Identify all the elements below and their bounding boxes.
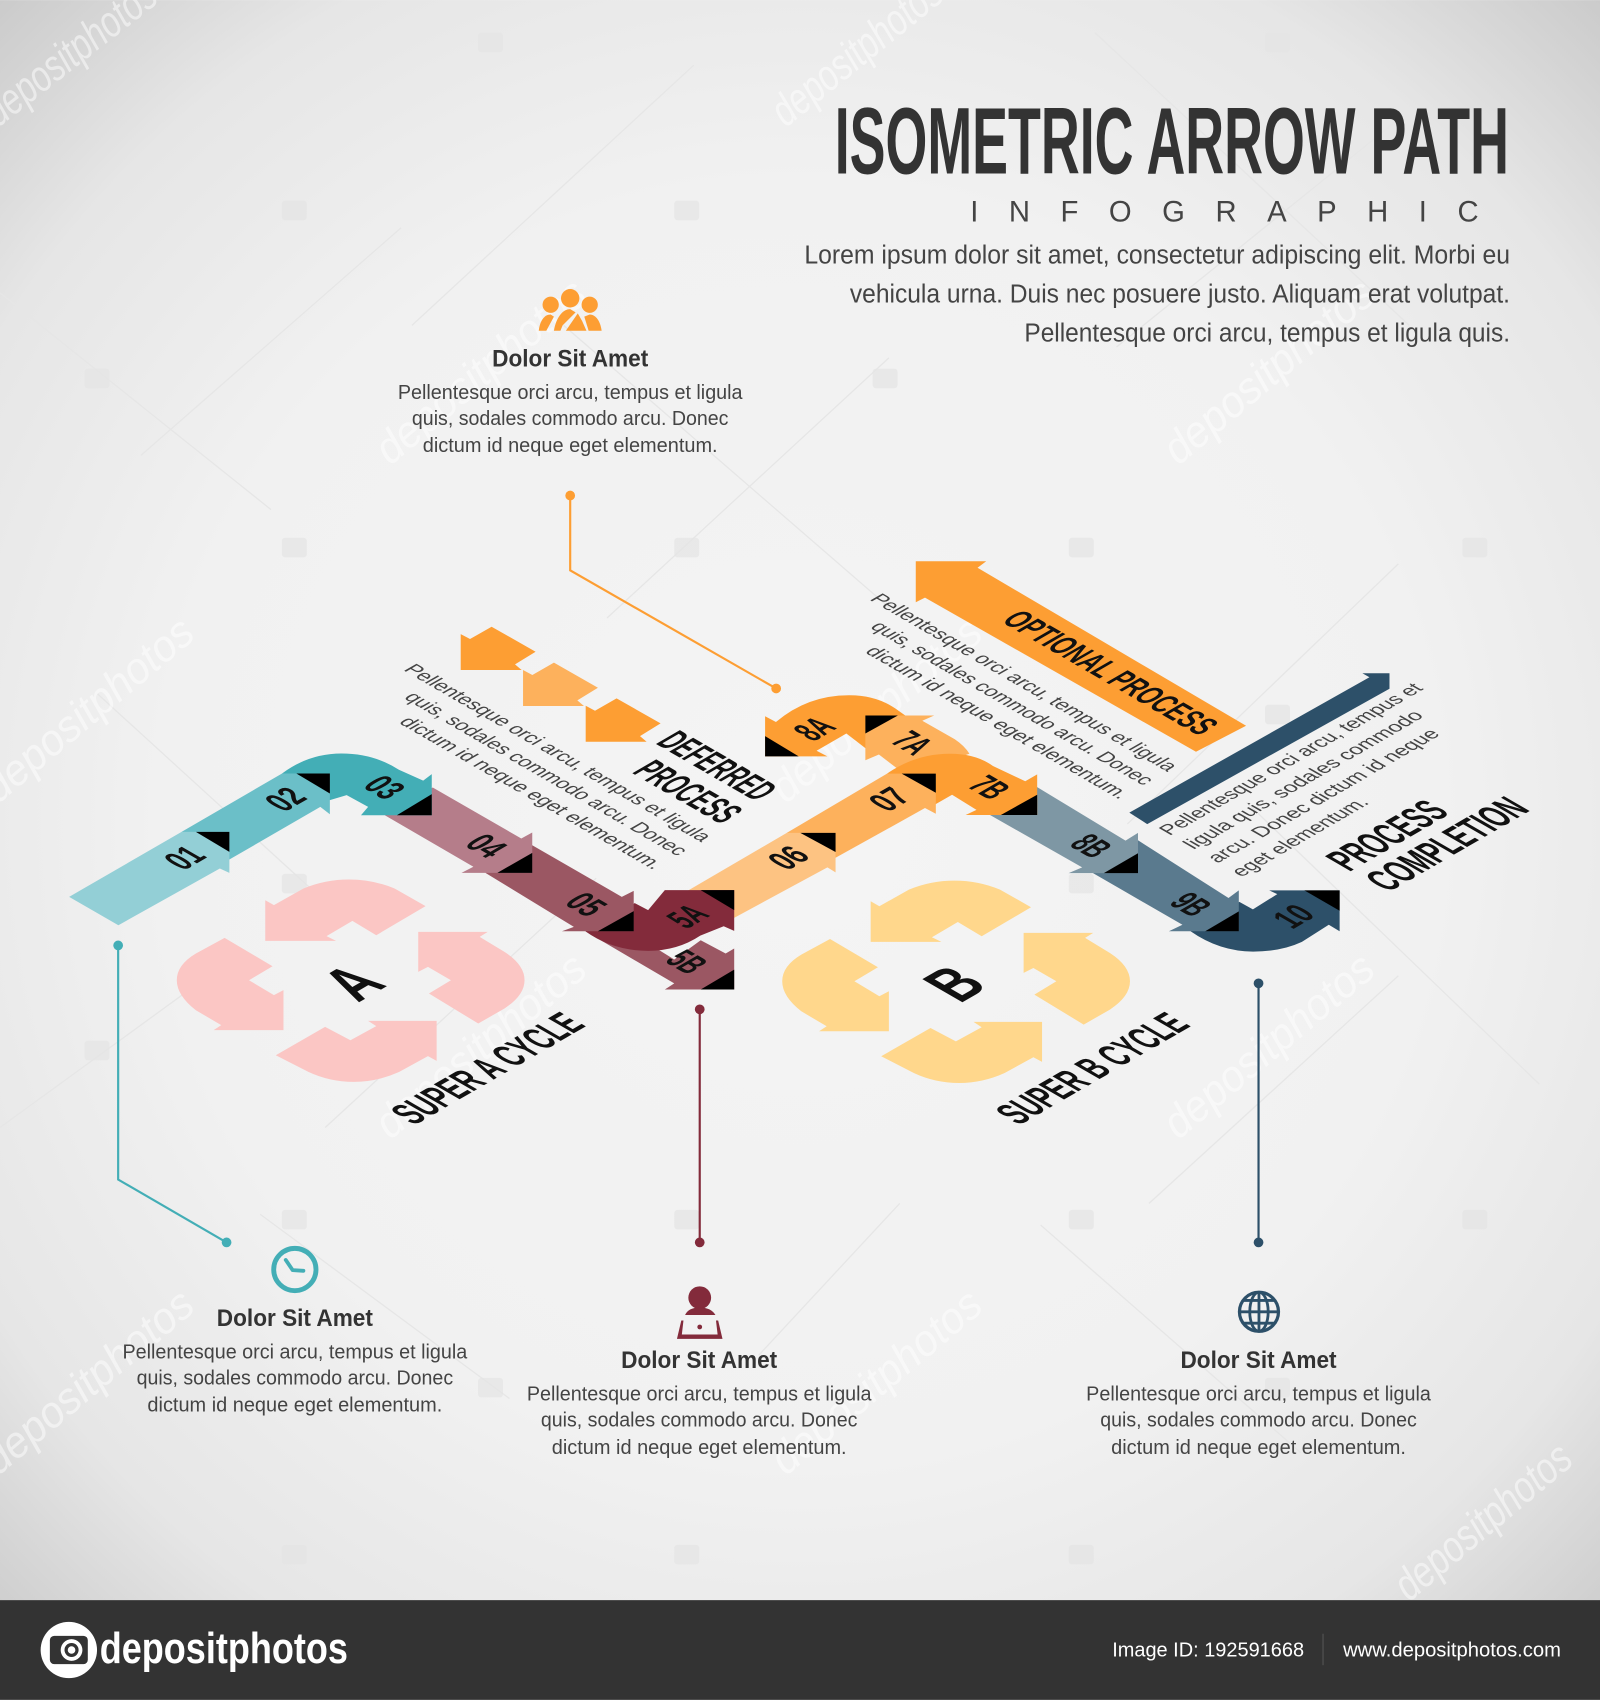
arrow 8A: 8A [785,712,844,746]
cycle A label: SUPER A CYCLE [381,1007,595,1131]
callout: teal [113,941,468,1417]
arrow 01 [69,832,229,925]
process completion text: arcu. Donec dictum id neque [1202,726,1445,866]
arrow 5A [585,890,734,951]
arrow 5B [585,931,734,990]
process completion text [1154,680,1500,880]
footer logo icon [41,1622,97,1678]
arrow 9B: 9B [1161,887,1221,922]
arrow 8A [765,695,908,756]
cycle B [782,881,1130,1083]
footer logo text: depositphotos [100,1625,348,1673]
arrow 04: 04 [456,829,517,863]
cycle B label: SUPER B CYCLE [986,1007,1200,1131]
small arrow 1 [461,627,536,670]
optional process arrow: OPTIONAL PROCESS [993,605,1227,740]
arrow 02 [182,773,330,860]
watermark text: depositphotos [1153,943,1384,1148]
callout: maroon [527,1004,872,1459]
process completion text: eget elementum. [1226,794,1374,880]
icon: clock [274,1248,316,1291]
intro text: Lorem ipsum dolor sit amet, consectetur adipiscing elit. Morbi eu [804,240,1510,270]
deferred process text: quis, sodales commodo arcu. Donec [399,689,693,859]
connector: navy [1254,978,1263,1247]
footer bar [0,1600,1600,1700]
description: dictum id neque eget elementum. [1111,1436,1406,1459]
deferred process label: PROCESS [623,755,752,829]
process completion text: Pellentesque orci arcu, tempus et [1154,680,1429,838]
heading: Dolor Sit Amet [217,1305,373,1332]
arrow 02: 02 [256,782,315,817]
icon: person at laptop [677,1286,722,1339]
connector: teal [113,941,231,1247]
heading: Dolor Sit Amet [492,346,648,373]
connector: orange [565,491,781,693]
description: Pellentesque orci arcu, tempus et ligula [527,1383,872,1406]
arrow 5A: 5A [658,899,718,934]
cycle A bottom arrow [276,1021,437,1082]
description [122,1340,468,1417]
arrow 04 [385,788,532,873]
cycle B top arrow [871,881,1031,942]
image id: Image ID: 192591668 [1112,1639,1304,1662]
small arrow 2 [523,663,598,706]
arrow 03 [282,754,432,815]
arrow 8B: 8B [1061,829,1121,863]
heading: Dolor Sit Amet [1180,1347,1337,1374]
arrow 9B [1093,840,1239,931]
description: quis, sodales commodo arcu. Donec [412,407,728,430]
subtitle: INFOGRAPHIC [970,196,1479,228]
intro text: Pellentesque orci arcu, tempus et ligula quis. [1024,318,1510,348]
arrow 03: 03 [354,770,414,805]
description [398,381,743,457]
arrow 01: 01 [155,841,215,875]
arrow 05 [485,845,634,931]
arrow 7B: 7B [959,770,1019,805]
cycle A left arrow [177,938,283,1030]
connector: maroon [695,1004,705,1247]
optional process arrow [916,561,1246,752]
intro text [804,240,1510,348]
cycle A letter: A [306,956,401,1010]
description: dictum id neque eget elementum. [552,1436,847,1459]
cycle B bottom arrow [881,1022,1042,1083]
icon: globe [1239,1292,1278,1331]
cycle A top arrow [265,879,426,941]
watermark text: depositphotos [1153,269,1384,474]
description: quis, sodales commodo arcu. Donec [541,1409,857,1432]
arrow 10: 10 [1264,899,1324,934]
deferred process text: dictum id neque eget elementum. [394,714,669,873]
description [1086,1383,1431,1459]
icon: people [539,289,602,331]
callout: orange top [398,289,781,693]
arrow 5B: 5B [657,945,717,979]
heading: Dolor Sit Amet [621,1347,777,1374]
arrow 10 [1191,890,1340,952]
arrow 7A: 7A [882,726,942,760]
arrow 7A [865,715,969,775]
cycle B left arrow [782,939,889,1031]
process completion text: ligula quis, sodales commodo [1178,707,1429,852]
watermark text: depositphotos [365,269,596,474]
watermark text: depositphotos [761,607,992,812]
arrow 06 [685,833,836,932]
deferred process label [623,726,786,829]
arrow path [69,695,1340,990]
description: quis, sodales commodo arcu. Donec [1100,1409,1417,1432]
arrow 05: 05 [556,887,616,922]
optional process text: dictum id neque eget elementum. [860,643,1135,802]
cycle B right arrow [1024,933,1130,1025]
cycle B letter: B [908,957,1003,1011]
description: quis, sodales commodo arcu. Donec [137,1366,453,1389]
description: dictum id neque eget elementum. [423,434,718,457]
process completion label: PROCESS [1316,794,1459,877]
arrow 07: 07 [859,782,919,817]
description: dictum id neque eget elementum. [147,1394,442,1417]
cycle A [177,879,525,1082]
small arrow 3 [586,698,661,742]
deferred process arrows [461,627,661,742]
process completion label [1316,791,1540,898]
arrow 8B [990,787,1138,873]
website: www.depositphotos.com [1342,1639,1561,1662]
intro text: vehicula urna. Duis nec posuere justo. Aliquam erat volutpat. [850,279,1510,309]
arrow 06: 06 [759,841,818,875]
deferred process label: DEFERRED [647,726,786,806]
description: Pellentesque orci arcu, tempus et ligula [398,381,743,404]
process completion arrow [1129,673,1389,824]
callout: navy [1086,978,1431,1459]
deferred process text: Pellentesque orci arcu, tempus et ligula [399,661,717,845]
watermark text: depositphotos [761,1279,992,1484]
optional process text: quis, sodales commodo arcu. Donec [865,619,1159,788]
optional process text: Pellentesque orci arcu, tempus et ligula [865,591,1184,775]
description [527,1383,872,1459]
description: Pellentesque orci arcu, tempus et ligula [1086,1383,1431,1406]
watermark text: depositphotos [365,943,596,1148]
cycle A right arrow [418,932,525,1024]
description: Pellentesque orci arcu, tempus et ligula [122,1340,468,1363]
arrow 7B [887,754,1037,815]
arrow 07 [787,774,936,858]
